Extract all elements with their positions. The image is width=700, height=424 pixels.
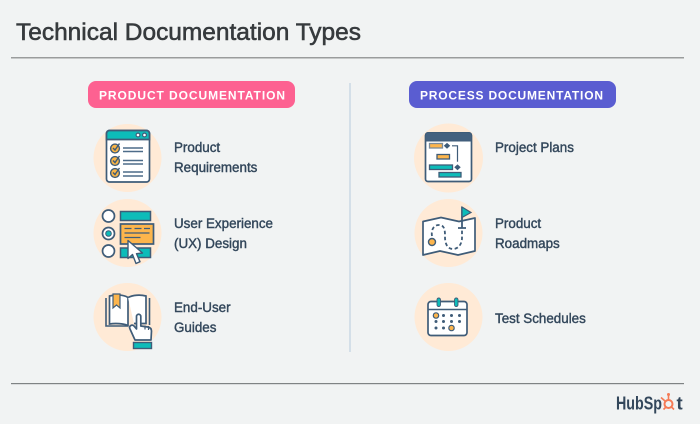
badge: process documentation bbox=[409, 81, 616, 108]
logo: hubspot: t bbox=[676, 392, 683, 414]
icon: user experience wireframe with cursor bbox=[94, 199, 162, 267]
label: user experience design: User Experience bbox=[174, 216, 273, 231]
label: product requirements: Requirements bbox=[174, 160, 258, 175]
label: product roadmaps: Roadmaps bbox=[495, 236, 560, 251]
logo: hubspot: HubSp bbox=[616, 392, 662, 414]
label: product requirements: Product bbox=[174, 140, 220, 155]
icon: end-user guide book with hand bbox=[94, 283, 162, 351]
badge: product documentation: PRODUCT DOCUMENTATION bbox=[99, 88, 285, 102]
icon: product requirements checklist bbox=[94, 124, 162, 192]
icon: test schedule calendar bbox=[414, 283, 482, 351]
label: product roadmaps: Product bbox=[495, 216, 541, 231]
badge: product documentation bbox=[88, 81, 295, 108]
label: test schedules: Test Schedules bbox=[495, 311, 586, 326]
badge: process documentation: PROCESS DOCUMENTATION bbox=[420, 88, 603, 102]
label: project plans: Project Plans bbox=[495, 140, 574, 155]
label: user experience design: (UX) Design bbox=[174, 236, 247, 251]
title: Technical Documentation Types bbox=[16, 19, 361, 46]
label: end-user guides: Guides bbox=[174, 320, 217, 335]
icon: project plan gantt chart bbox=[414, 124, 483, 192]
label: end-user guides: End-User bbox=[174, 300, 231, 315]
icon: product roadmap with flag bbox=[414, 199, 482, 267]
